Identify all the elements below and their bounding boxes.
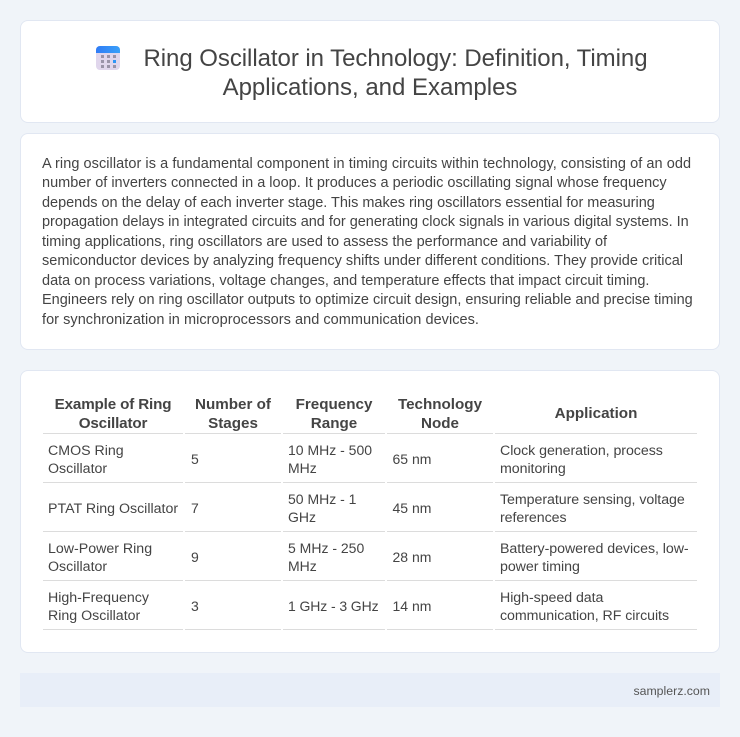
- text block: description: propagation delays in integrated circuits and for generating clock signals in various digital systems. In: [42, 214, 689, 230]
- row: Low-Power: 9: [191, 549, 199, 565]
- icon: calendar: [96, 46, 120, 70]
- table header: Frequency: [296, 396, 372, 412]
- row: High-Frequency: 14 nm: [392, 598, 431, 614]
- table header: Node: [421, 414, 459, 432]
- row: Low-Power: MHz: [288, 558, 317, 574]
- row: PTAT: GHz: [288, 509, 316, 525]
- row: CMOS: MHz: [288, 460, 317, 476]
- table header: Stages: [208, 414, 258, 432]
- row: PTAT: [48, 491, 685, 526]
- text block: description: A ring oscillator is a fundamental component in timing circuits within technology, consisting of an odd: [42, 156, 691, 172]
- row: Low-Power: Oscillator: [48, 559, 107, 575]
- table header: Oscillator: [79, 414, 147, 432]
- row: PTAT: 7: [191, 500, 199, 516]
- text block: description: [42, 156, 693, 328]
- text block: description: semiconductor devices by analyzing frequency shifts under different conditions. They provide critical: [42, 253, 683, 269]
- row: Low-Power: 28 nm: [392, 549, 431, 565]
- row: High-Frequency: 1 GHz - 3 GHz: [288, 598, 378, 614]
- row: CMOS: 10 MHz - 500: [288, 442, 372, 458]
- text block: description: data on process variations, voltage changes, and temperature effects that impact circuit timing.: [42, 272, 649, 288]
- row: PTAT: PTAT Ring Oscillator: [48, 501, 178, 517]
- row: PTAT: Temperature sensing, voltage: [500, 492, 685, 508]
- row: PTAT: 45 nm: [392, 500, 431, 516]
- title: Ring Oscillator in Technology: Definition, Timing: [143, 45, 648, 72]
- panel: table: [20, 370, 720, 653]
- text block: description: depends on the delay of each inverter stage. This makes ring oscillators essential for measuring: [42, 194, 655, 210]
- row: CMOS: 65 nm: [392, 451, 431, 467]
- table header: Range: [311, 414, 357, 432]
- header panel: [20, 20, 720, 123]
- footer text: samplerz.com: [633, 684, 710, 698]
- row: High-Frequency: communication, RF circuits: [500, 608, 669, 624]
- row: Low-Power: power timing: [500, 559, 580, 575]
- text block: description: timing applications, ring oscillators are used to assess the performance and variability of: [42, 234, 607, 250]
- row: CMOS: CMOS Ring: [48, 443, 124, 459]
- table header: Technology: [398, 396, 482, 412]
- row: Low-Power: Low-Power Ring: [48, 541, 152, 557]
- table header: Number of: [195, 396, 271, 412]
- row: PTAT: references: [500, 510, 567, 526]
- text block: description: number of inverters connected in a loop. It produces a periodic oscillating signal whose frequency: [42, 175, 667, 191]
- row: CMOS: Oscillator: [48, 461, 107, 477]
- table header: Example of Ring: [55, 396, 171, 412]
- row: Low-Power: Battery-powered devices, low-: [500, 541, 689, 557]
- panel: description: [20, 133, 720, 350]
- row: CMOS: monitoring: [500, 461, 566, 477]
- text block: description: for synchronization in microprocessors and communication devices.: [42, 312, 479, 328]
- table: [43, 396, 697, 630]
- row: High-Frequency: High-speed data: [500, 590, 603, 606]
- row: Low-Power: 5 MHz - 250: [288, 540, 364, 556]
- row: PTAT: 50 MHz - 1: [288, 491, 356, 507]
- footer bar: [20, 673, 720, 707]
- table header: Application: [555, 404, 637, 422]
- row: High-Frequency: High-Frequency: [48, 590, 149, 606]
- text block: description: Engineers rely on ring oscillator outputs to optimize circuit design, ensuring reliable and precise timing: [42, 292, 693, 308]
- row: Low-Power: [48, 540, 689, 575]
- table header: [55, 396, 637, 432]
- row: CMOS: 5: [191, 451, 199, 467]
- row: CMOS: [48, 442, 663, 477]
- row: CMOS: Clock generation, process: [500, 443, 663, 459]
- row: High-Frequency: 3: [191, 598, 199, 614]
- title: Applications, and Examples: [223, 74, 517, 101]
- row: High-Frequency: Ring Oscillator: [48, 608, 140, 624]
- row: High-Frequency: [48, 590, 669, 624]
- title: [143, 45, 648, 101]
